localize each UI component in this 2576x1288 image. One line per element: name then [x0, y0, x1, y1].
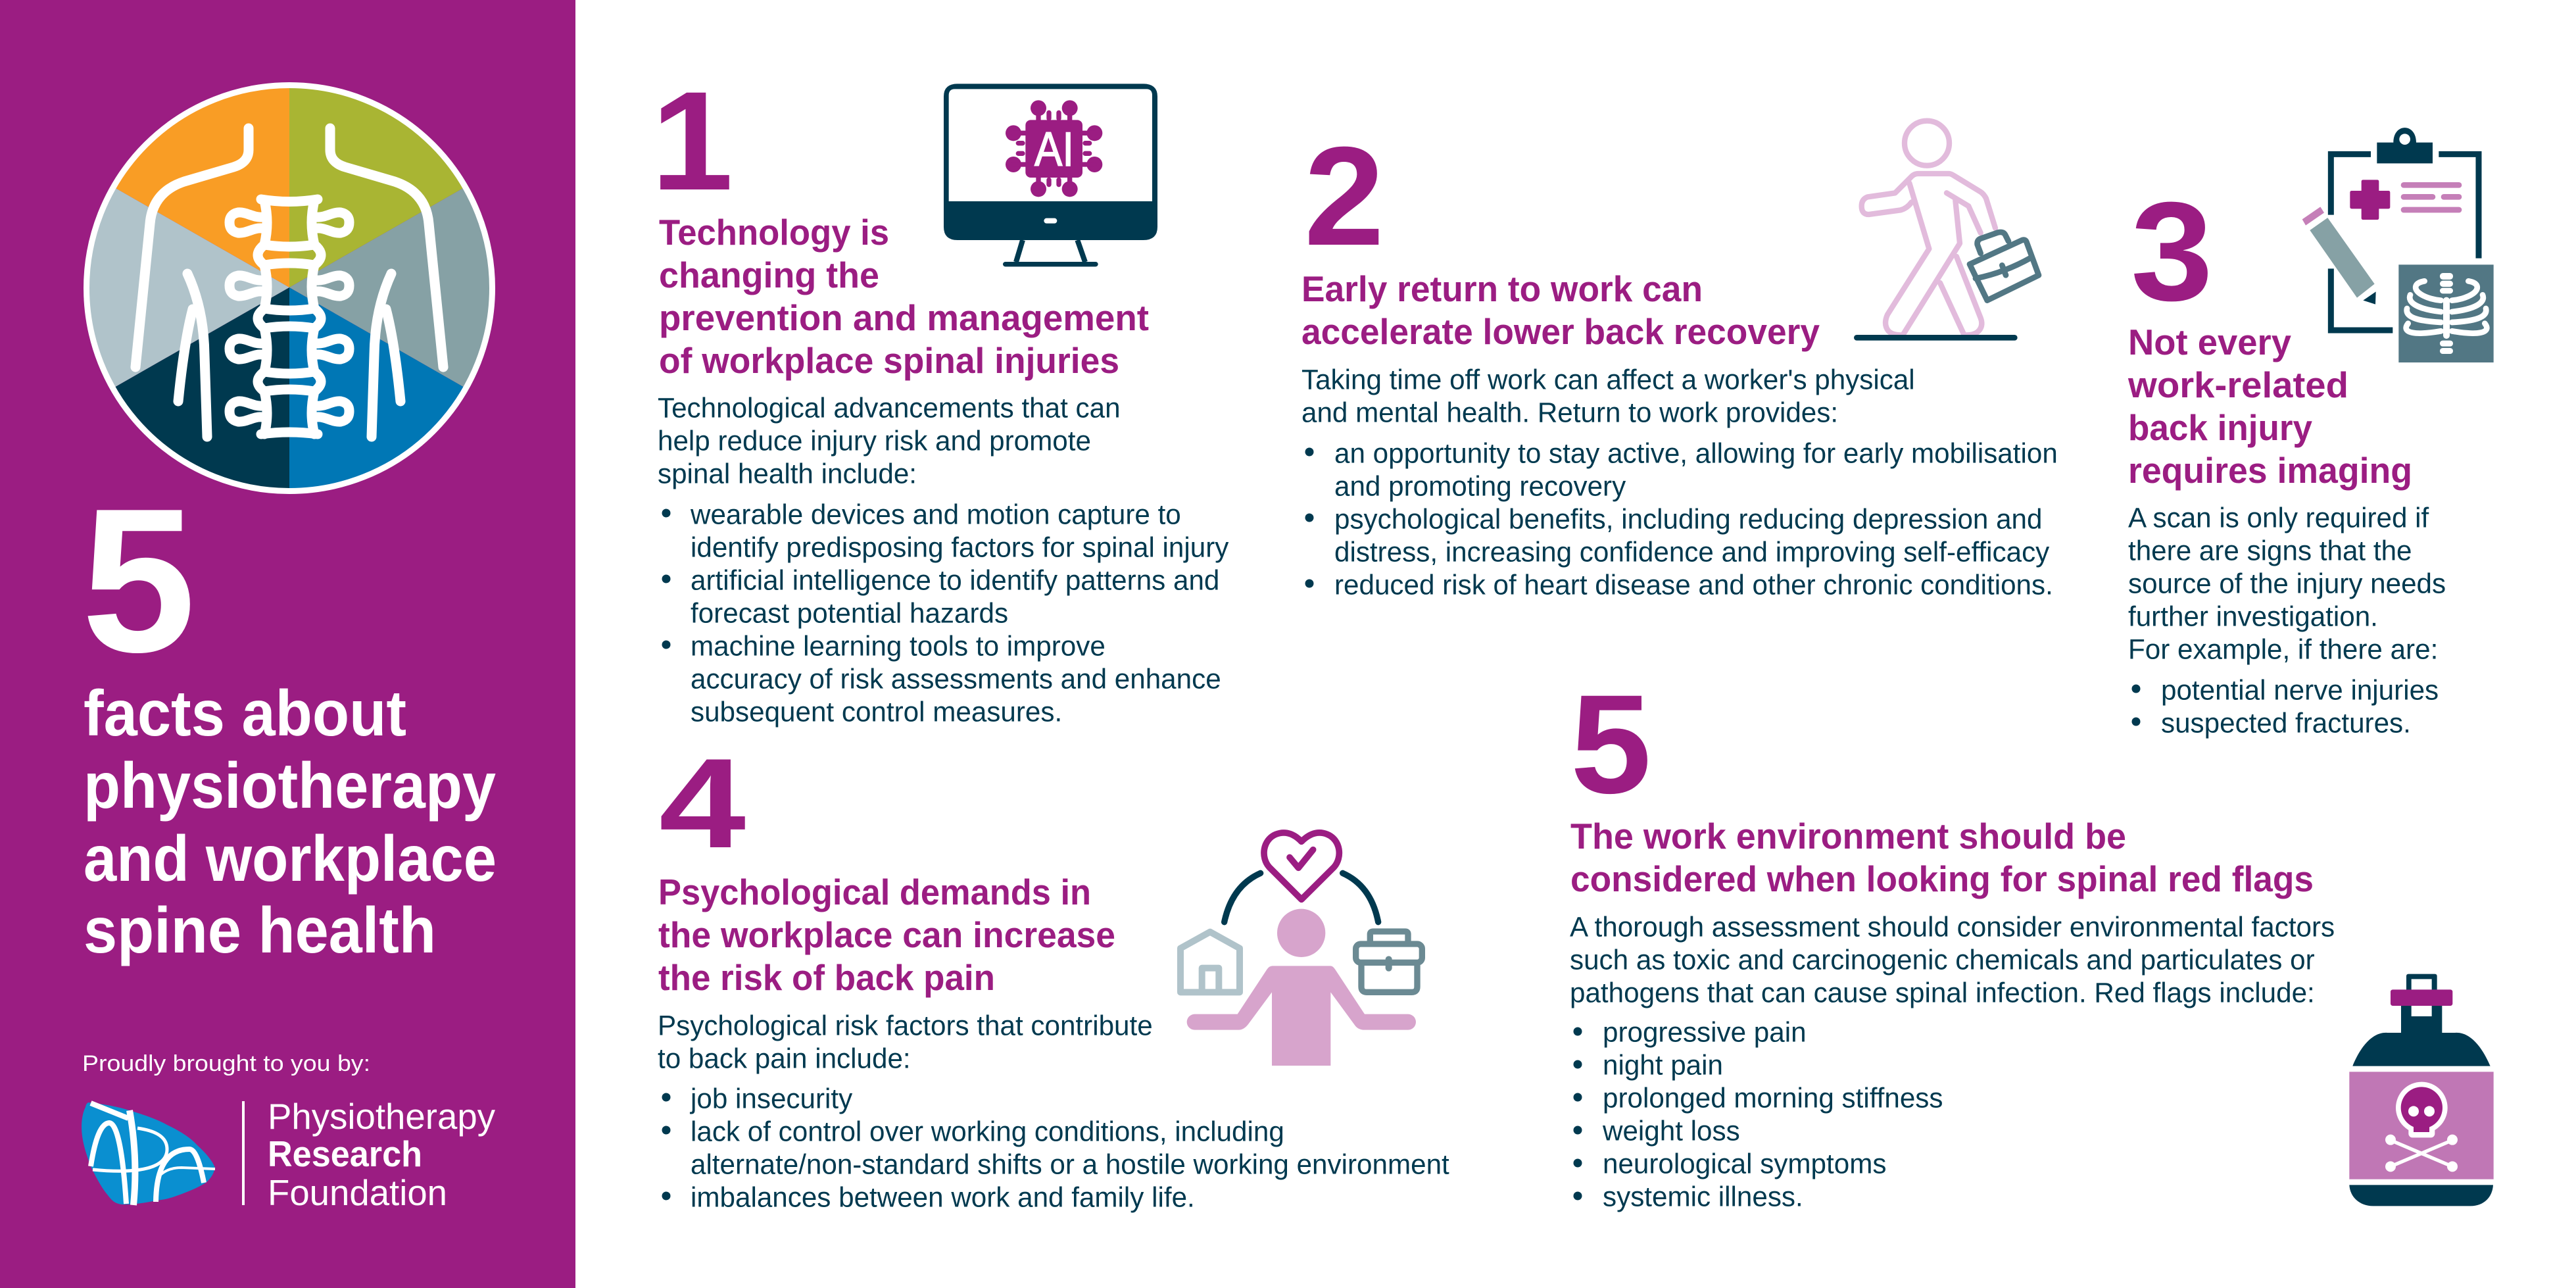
- list: fact 1 bullets: wearable devices and motion capture to: [690, 499, 1181, 530]
- number 4: 4: [659, 732, 746, 875]
- text: fact 4 intro: to back pain include:: [658, 1043, 911, 1074]
- list: fact 4 bullets: lack of control over working conditions, including: [691, 1116, 1284, 1147]
- text: fact 3 intro: [2128, 503, 2446, 664]
- list: fact 5 bullets: [1573, 1017, 1943, 1212]
- text: fact 3 intro: further investigation.: [2128, 601, 2378, 632]
- panel: fact 5 red flags: [1570, 666, 2494, 1212]
- list: fact 5 bullets: prolonged morning stiffness: [1603, 1083, 1943, 1113]
- title: facts about physiotherapy and workplace spine health: physiotherapy: [84, 749, 496, 822]
- title: facts about physiotherapy and workplace spine health: facts about: [84, 677, 406, 749]
- heading: fact 3: Not every: [2128, 322, 2291, 362]
- icon: person balancing home and work: [1180, 833, 1422, 1066]
- heading: fact 2: [1301, 268, 1820, 352]
- heading: fact 1: Technology is: [659, 212, 889, 253]
- heading: fact 5: considered when looking for spinal red flags: [1570, 858, 2314, 899]
- list: fact 5 bullets: night pain: [1603, 1050, 1723, 1080]
- text: fact 4 intro: Psychological risk factors that contribute: [658, 1010, 1153, 1041]
- text: fact 5 intro: pathogens that can cause spinal infection. Red flags include:: [1570, 978, 2315, 1008]
- number 3: 3: [2131, 173, 2213, 330]
- text: fact 1 intro: spinal health include:: [658, 458, 917, 489]
- heading: fact 4: [658, 872, 1115, 998]
- logo text: Physiotherapy Research Foundation: [268, 1096, 495, 1213]
- list: fact 1 bullets: machine learning tools to improve: [691, 630, 1106, 662]
- icon: walking person with briefcase: [1857, 121, 2039, 337]
- icon: poison bottle: [2349, 974, 2494, 1206]
- text: fact 2 intro: Taking time off work can affect a worker's physical: [1301, 364, 1915, 395]
- title: facts about physiotherapy and workplace spine health: spine health: [84, 894, 436, 966]
- panel: fact 1 technology: [651, 62, 1229, 728]
- list: fact 5 bullets: systemic illness.: [1603, 1181, 1803, 1212]
- heading: fact 1: [659, 212, 1149, 381]
- text: fact 3 intro: source of the injury needs: [2128, 568, 2446, 599]
- list: fact 2 bullets: psychological benefits, including reducing depression and: [1334, 504, 2042, 534]
- list: fact 5 bullets: progressive pain: [1603, 1017, 1807, 1047]
- heading: fact 4: the workplace can increase: [658, 914, 1115, 955]
- text: fact 3 intro: For example, if there are:: [2128, 634, 2438, 664]
- logo: APA blob: [82, 1102, 215, 1205]
- list: fact 1 bullets: accuracy of risk assessments and enhance: [691, 663, 1221, 695]
- heading: fact 2: Early return to work can: [1301, 268, 1703, 309]
- logo text: Physiotherapy Research Foundation: Physiotherapy: [268, 1096, 495, 1137]
- list: fact 3 bullets: [2132, 675, 2439, 738]
- heading: fact 3: work-related: [2127, 364, 2348, 405]
- text: fact 2 intro: and mental health. Return to work provides:: [1301, 397, 1838, 428]
- heading: fact 1: changing the: [659, 255, 879, 295]
- text: fact 5 intro: such as toxic and carcinogenic chemicals and particulates or: [1570, 945, 2315, 975]
- list: fact 5 bullets: neurological symptoms: [1603, 1149, 1886, 1179]
- list: fact 1 bullets: subsequent control measures.: [691, 696, 1062, 728]
- list: fact 1 bullets: forecast potential hazards: [691, 597, 1008, 629]
- text: fact 1 intro: Technological advancements that can: [658, 392, 1121, 424]
- panel: fact 3 imaging: [2127, 128, 2494, 738]
- text: fact 2 intro: [1301, 364, 1915, 428]
- number 2: 2: [1304, 118, 1384, 275]
- list: fact 1 bullets: [662, 499, 1229, 728]
- text: fact 3 intro: there are signs that the: [2128, 535, 2412, 566]
- text: fact 1 intro: [658, 392, 1121, 489]
- heading: fact 2: accelerate lower back recovery: [1301, 311, 1820, 352]
- panel: fact 2 return to work: [1301, 118, 2058, 600]
- list: fact 2 bullets: distress, increasing confidence and improving self-efficacy: [1334, 537, 2050, 567]
- list: fact 1 bullets: identify predisposing factors for spinal injury: [691, 532, 1229, 563]
- list: fact 2 bullets: an opportunity to stay active, allowing for early mobilisation: [1334, 438, 2058, 468]
- list: fact 4 bullets: imbalances between work and family life.: [691, 1181, 1195, 1213]
- heading: fact 4: Psychological demands in: [658, 872, 1091, 912]
- text: fact 5 intro: A thorough assessment should consider environmental factors: [1570, 912, 2335, 942]
- list: fact 2 bullets: and promoting recovery: [1334, 471, 1626, 501]
- heading: fact 1: of workplace spinal injuries: [659, 340, 1119, 381]
- divider: logo separator: [242, 1101, 245, 1205]
- list: fact 4 bullets: alternate/non-standard shifts or a hostile working environment: [691, 1149, 1449, 1180]
- list: fact 5 bullets: weight loss: [1602, 1116, 1740, 1146]
- logo text: Physiotherapy Research Foundation: Research: [268, 1133, 422, 1174]
- list: fact 2 bullets: reduced risk of heart disease and other chronic conditions.: [1334, 570, 2053, 600]
- list: fact 4 bullets: job insecurity: [689, 1083, 853, 1114]
- list: fact 4 bullets: [662, 1083, 1449, 1213]
- number 1: 1: [651, 62, 733, 220]
- icon: clipboard, pencil and x-ray: [2302, 128, 2494, 362]
- panel: fact 4 psychological demands: [658, 732, 1449, 1213]
- text: fact 3 intro: A scan is only required if: [2128, 503, 2429, 533]
- list: fact 1 bullets: artificial intelligence to identify patterns and: [691, 564, 1219, 596]
- panel: left sidebar: [0, 0, 575, 1288]
- text: fact 5 intro: [1570, 912, 2335, 1008]
- list: fact 2 bullets: [1305, 438, 2058, 600]
- text: brought to you by: Proudly brought to you by:: [82, 1051, 370, 1076]
- logo text: Physiotherapy Research Foundation: Foundation: [268, 1172, 447, 1213]
- heading: fact 3: requires imaging: [2128, 450, 2412, 491]
- heading: fact 4: the risk of back pain: [658, 957, 995, 998]
- heading: fact 3: [2127, 322, 2412, 491]
- heading: fact 5: [1570, 816, 2314, 899]
- icon: monitor with AI chip: [944, 84, 1157, 264]
- icon: spine and torso roundel: [84, 82, 495, 494]
- text: fact 4 intro: [658, 1010, 1153, 1074]
- heading: fact 3: back injury: [2128, 407, 2312, 448]
- text: fact 1 intro: help reduce injury risk and promote: [658, 425, 1091, 457]
- number 5: 5: [1570, 666, 1651, 823]
- title: facts about physiotherapy and workplace spine health: [84, 677, 497, 966]
- list: fact 3 bullets: suspected fractures.: [2161, 708, 2411, 738]
- icon: monitor with AI chip: AI: [1034, 123, 1074, 176]
- heading: large numeral 5: 5: [82, 466, 196, 695]
- heading: fact 1: prevention and management: [659, 297, 1149, 338]
- title: facts about physiotherapy and workplace spine health: and workplace: [84, 822, 497, 895]
- heading: fact 5: The work environment should be: [1570, 816, 2126, 856]
- list: fact 3 bullets: potential nerve injuries: [2161, 675, 2439, 705]
